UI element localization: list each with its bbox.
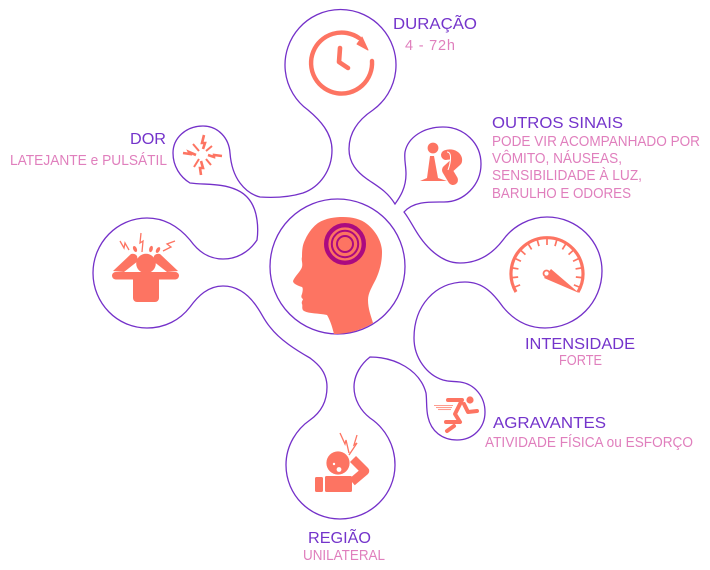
icon: speedometer	[511, 238, 583, 293]
heading: outros sinais: SENSIBILIDADE À LUZ,	[492, 167, 642, 184]
heading: duração	[393, 16, 477, 54]
heading: duração: 4 - 72h	[405, 38, 455, 54]
icon: stressed man	[112, 233, 179, 302]
heading: agravantes	[485, 415, 693, 451]
icon: running man	[434, 396, 477, 431]
outline: connected bubbles	[93, 10, 602, 519]
icon: pain starburst	[183, 135, 222, 175]
heading: dor: LATEJANTE e PULSÁTIL	[10, 152, 167, 169]
heading: intensidade: INTENSIDADE	[525, 336, 635, 353]
heading: outros sinais: BARULHO E ODORES	[492, 186, 631, 202]
icon: head with pain rings	[293, 217, 382, 334]
heading: outros sinais: OUTROS SINAIS	[492, 115, 623, 132]
heading: duração: DURAÇÃO	[393, 16, 477, 33]
heading: outros sinais	[492, 115, 700, 202]
heading: região: REGIÃO	[308, 530, 371, 547]
heading: agravantes: AGRAVANTES	[493, 415, 606, 432]
icon: person vomiting	[420, 143, 457, 181]
heading: agravantes: ATIVIDADE FÍSICA ou ESFORÇO	[485, 434, 693, 451]
heading: dor: DOR	[130, 131, 166, 148]
heading: outros sinais: PODE VIR ACOMPANHADO POR	[492, 134, 700, 150]
center circle	[270, 199, 405, 334]
heading: intensidade	[525, 336, 635, 369]
heading: outros sinais: VÔMITO, NÁUSEAS,	[492, 150, 622, 167]
heading: região	[303, 530, 385, 564]
heading: região: UNILATERAL	[303, 548, 385, 564]
icon: man holding head	[315, 433, 365, 492]
icon: clock with arrow	[311, 33, 372, 94]
heading: dor	[10, 131, 167, 169]
heading: intensidade: FORTE	[559, 353, 602, 369]
